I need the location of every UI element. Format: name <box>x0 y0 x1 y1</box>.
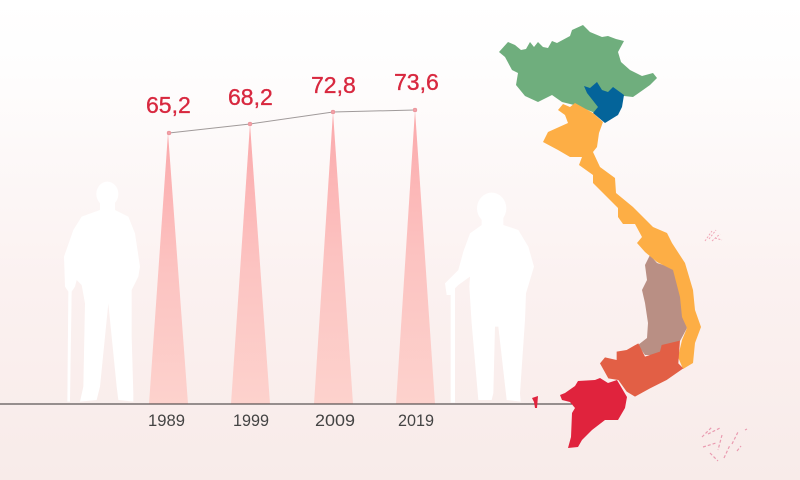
cone bars <box>149 110 435 404</box>
paracel islands <box>705 230 722 241</box>
year labels <box>148 411 434 430</box>
region: north central and central coast <box>543 103 701 369</box>
region: red river delta <box>584 82 624 123</box>
value labels: 68,2 <box>228 84 273 110</box>
elderly man silhouette <box>64 182 140 402</box>
region: southeast <box>600 341 683 397</box>
year labels: 2009 <box>315 411 355 430</box>
value labels <box>146 69 439 118</box>
year labels: 1999 <box>233 411 269 430</box>
elderly woman silhouette <box>445 193 534 403</box>
map of Vietnam <box>499 25 747 461</box>
baseline axis <box>0 403 572 405</box>
region: mekong delta <box>532 378 627 448</box>
spratly islands <box>702 427 747 461</box>
life expectancy trend line <box>167 108 417 135</box>
year labels: 1989 <box>148 411 185 430</box>
region: northern midlands and mountains <box>499 25 657 115</box>
value labels: 65,2 <box>146 92 191 118</box>
year labels: 2019 <box>398 411 434 430</box>
value labels: 73,6 <box>394 69 439 95</box>
region: central highlands <box>638 255 687 355</box>
value labels: 72,8 <box>311 72 356 98</box>
